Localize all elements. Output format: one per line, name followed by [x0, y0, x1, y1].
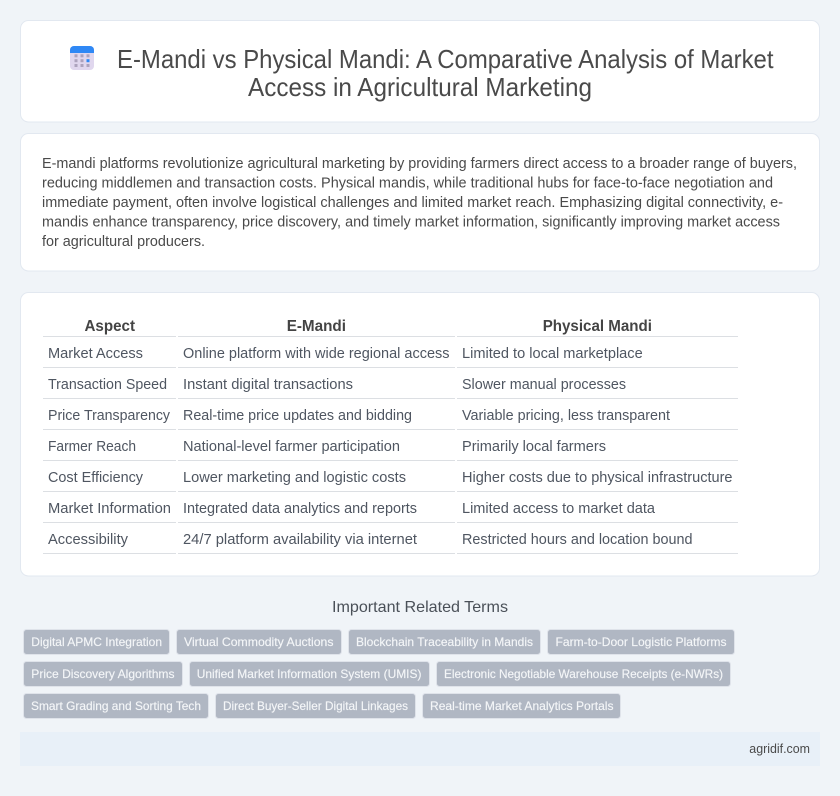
- row: Price Transparency: Real-time price updates and bidding: [183, 408, 412, 424]
- tag: [24, 630, 170, 654]
- tag: [190, 662, 430, 686]
- row: Cost Efficiency: [48, 470, 732, 486]
- row: Transaction Speed: Transaction Speed: [48, 377, 167, 393]
- tag: Virtual Commodity Auctions: [184, 635, 334, 649]
- tag: Electronic Negotiable Warehouse Receipts (e-NWRs): [444, 667, 723, 681]
- tag: Unified Market Information System (UMIS): [197, 667, 422, 681]
- row: Transaction Speed: [48, 377, 626, 393]
- row: Transaction Speed: Instant digital transactions: [183, 377, 353, 393]
- row: Cost Efficiency: Higher costs due to physical infrastructure: [462, 470, 732, 486]
- tag: [548, 630, 734, 654]
- tag: [216, 694, 416, 718]
- row: Market Access: [48, 346, 643, 362]
- tag: Smart Grading and Sorting Tech: [31, 699, 201, 713]
- tag: Farm-to-Door Logistic Platforms: [556, 635, 726, 649]
- panel: introduction: [20, 134, 820, 271]
- row: Cost Efficiency: Cost Efficiency: [48, 470, 144, 486]
- row: Market Access: Online platform with wide regional access: [183, 346, 450, 362]
- footer: agridif.com: [749, 741, 810, 756]
- tag: [24, 694, 208, 718]
- title: E-Mandi vs Physical Mandi: A Comparative Analysis of Market: [117, 46, 774, 74]
- row: Transaction Speed: Slower manual processes: [462, 377, 626, 393]
- tag: [436, 662, 730, 686]
- row: Farmer Reach: [48, 439, 606, 455]
- row: Market Access: Market Access: [48, 346, 143, 362]
- title: [117, 46, 774, 102]
- row: Accessibility: Restricted hours and location bound: [462, 532, 692, 548]
- row: Market Information: Integrated data analytics and reports: [183, 501, 417, 517]
- row: Market Access: Limited to local marketplace: [462, 346, 643, 362]
- tag: [176, 630, 342, 654]
- row: Market Information: [48, 501, 655, 517]
- tag: Price Discovery Algorithms: [31, 667, 174, 681]
- intro text block: for agricultural producers.: [42, 234, 205, 250]
- intro text block: E-mandi platforms revolutionize agricultural marketing by providing farmers direct access to a broader range of buyers,: [42, 156, 797, 172]
- row: Cost Efficiency: Lower marketing and logistic costs: [183, 470, 406, 486]
- footer: [20, 732, 820, 766]
- tag: [348, 630, 540, 654]
- intro text block: mandis enhance transparency, price discovery, and timely market information, significantly improving market access: [42, 214, 780, 230]
- header panel: [20, 20, 820, 122]
- related term tags: [24, 630, 734, 718]
- row: Price Transparency: Variable pricing, less transparent: [462, 408, 670, 424]
- heading: related terms: Important Related Terms: [332, 599, 508, 616]
- tag: Blockchain Traceability in Mandis: [356, 635, 533, 649]
- intro text block: immediate payment, often involve logistical challenges and limited market reach. Emphasizing digital connectivity, e-: [42, 195, 783, 211]
- row: Price Transparency: [48, 408, 670, 424]
- title: Access in Agricultural Marketing: [248, 74, 592, 102]
- row: Accessibility: Accessibility: [48, 532, 129, 548]
- tag: [422, 694, 620, 718]
- table header row: [84, 318, 652, 335]
- panel: comparison table: [20, 292, 820, 576]
- row: Accessibility: [48, 532, 692, 548]
- table header row: Aspect: [84, 318, 135, 335]
- tag: Direct Buyer-Seller Digital Linkages: [223, 699, 408, 713]
- intro text block: [42, 156, 797, 250]
- row: Market Information: Market Information: [48, 501, 171, 517]
- intro text block: reducing middlemen and transaction costs. Physical mandis, while traditional hubs for face-to-face negotiation and: [42, 175, 773, 191]
- row: Farmer Reach: Farmer Reach: [48, 439, 136, 455]
- tag: Real-time Market Analytics Portals: [430, 699, 614, 713]
- row: Farmer Reach: National-level farmer participation: [183, 439, 400, 455]
- tag: Digital APMC Integration: [31, 635, 162, 649]
- row: Market Information: Limited access to market data: [462, 501, 655, 517]
- table header row: Physical Mandi: [543, 318, 652, 335]
- row: Price Transparency: Price Transparency: [48, 408, 171, 424]
- row: Farmer Reach: Primarily local farmers: [462, 439, 606, 455]
- icon: calendar: [70, 46, 94, 70]
- row: Accessibility: 24/7 platform availability via internet: [183, 532, 417, 548]
- table header row: E-Mandi: [287, 318, 346, 335]
- tag: [24, 662, 182, 686]
